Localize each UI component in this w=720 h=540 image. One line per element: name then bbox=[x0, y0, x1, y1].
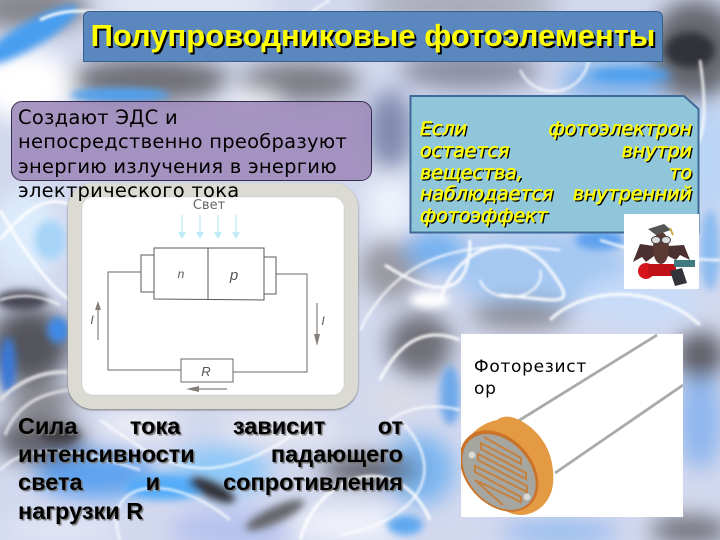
text block: current dependence: света и сопротивления bbox=[18, 469, 403, 495]
leads bbox=[515, 335, 683, 473]
label: light: Свет bbox=[193, 198, 226, 213]
photo caption: Фоторезист bbox=[474, 357, 587, 377]
text block: current dependence: Сила тока зависит от bbox=[18, 413, 403, 439]
icon: owl with books bbox=[624, 214, 699, 289]
callout text bbox=[420, 118, 693, 228]
text block: EMF description bbox=[18, 106, 347, 202]
photo: photoresistor bbox=[461, 334, 683, 517]
text block: current dependence: интенсивности падающего bbox=[18, 441, 403, 467]
semiconductor block n and p bbox=[141, 248, 276, 300]
text block: current dependence: нагрузки R bbox=[18, 498, 143, 524]
labels n, p: n bbox=[178, 267, 185, 281]
circuit diagram: p-n junction with load R bbox=[90, 198, 325, 392]
text block: EMF description: энергию излучения в энергию bbox=[18, 155, 337, 178]
circuit diagram: p-n junction with load R: p bbox=[229, 267, 238, 284]
panel: teal callout bbox=[410, 95, 700, 234]
title text: Полупроводниковые фотоэлементы bbox=[91, 18, 655, 53]
callout text: наблюдается внутренний bbox=[420, 183, 692, 205]
current arrows bbox=[95, 301, 320, 392]
photo caption bbox=[474, 357, 587, 399]
callout text: Если фотоэлектрон bbox=[420, 118, 692, 140]
light arrows bbox=[178, 215, 240, 239]
panel: diagram frame bbox=[68, 183, 358, 409]
component body bbox=[463, 417, 553, 515]
circuit diagram: p-n junction with load R: I bbox=[321, 314, 325, 328]
circuit wires and resistor bbox=[108, 272, 307, 382]
text block: EMF description: Создают ЭДС и bbox=[18, 106, 178, 129]
panel: purple box background bbox=[11, 101, 372, 181]
text block: EMF description: электрического тока bbox=[18, 179, 239, 202]
labels I: I bbox=[90, 313, 94, 327]
photo caption: ор bbox=[474, 379, 497, 399]
text block: EMF description: непосредственно преобразуют bbox=[18, 130, 347, 153]
callout text: остается внутри bbox=[420, 140, 692, 162]
callout text: вещества, то bbox=[420, 162, 692, 184]
title banner bbox=[83, 11, 663, 62]
text block: current dependence bbox=[18, 413, 404, 526]
sensor tracks bbox=[475, 437, 527, 505]
label R: R bbox=[201, 364, 211, 379]
callout text: фотоэффект bbox=[420, 205, 548, 227]
